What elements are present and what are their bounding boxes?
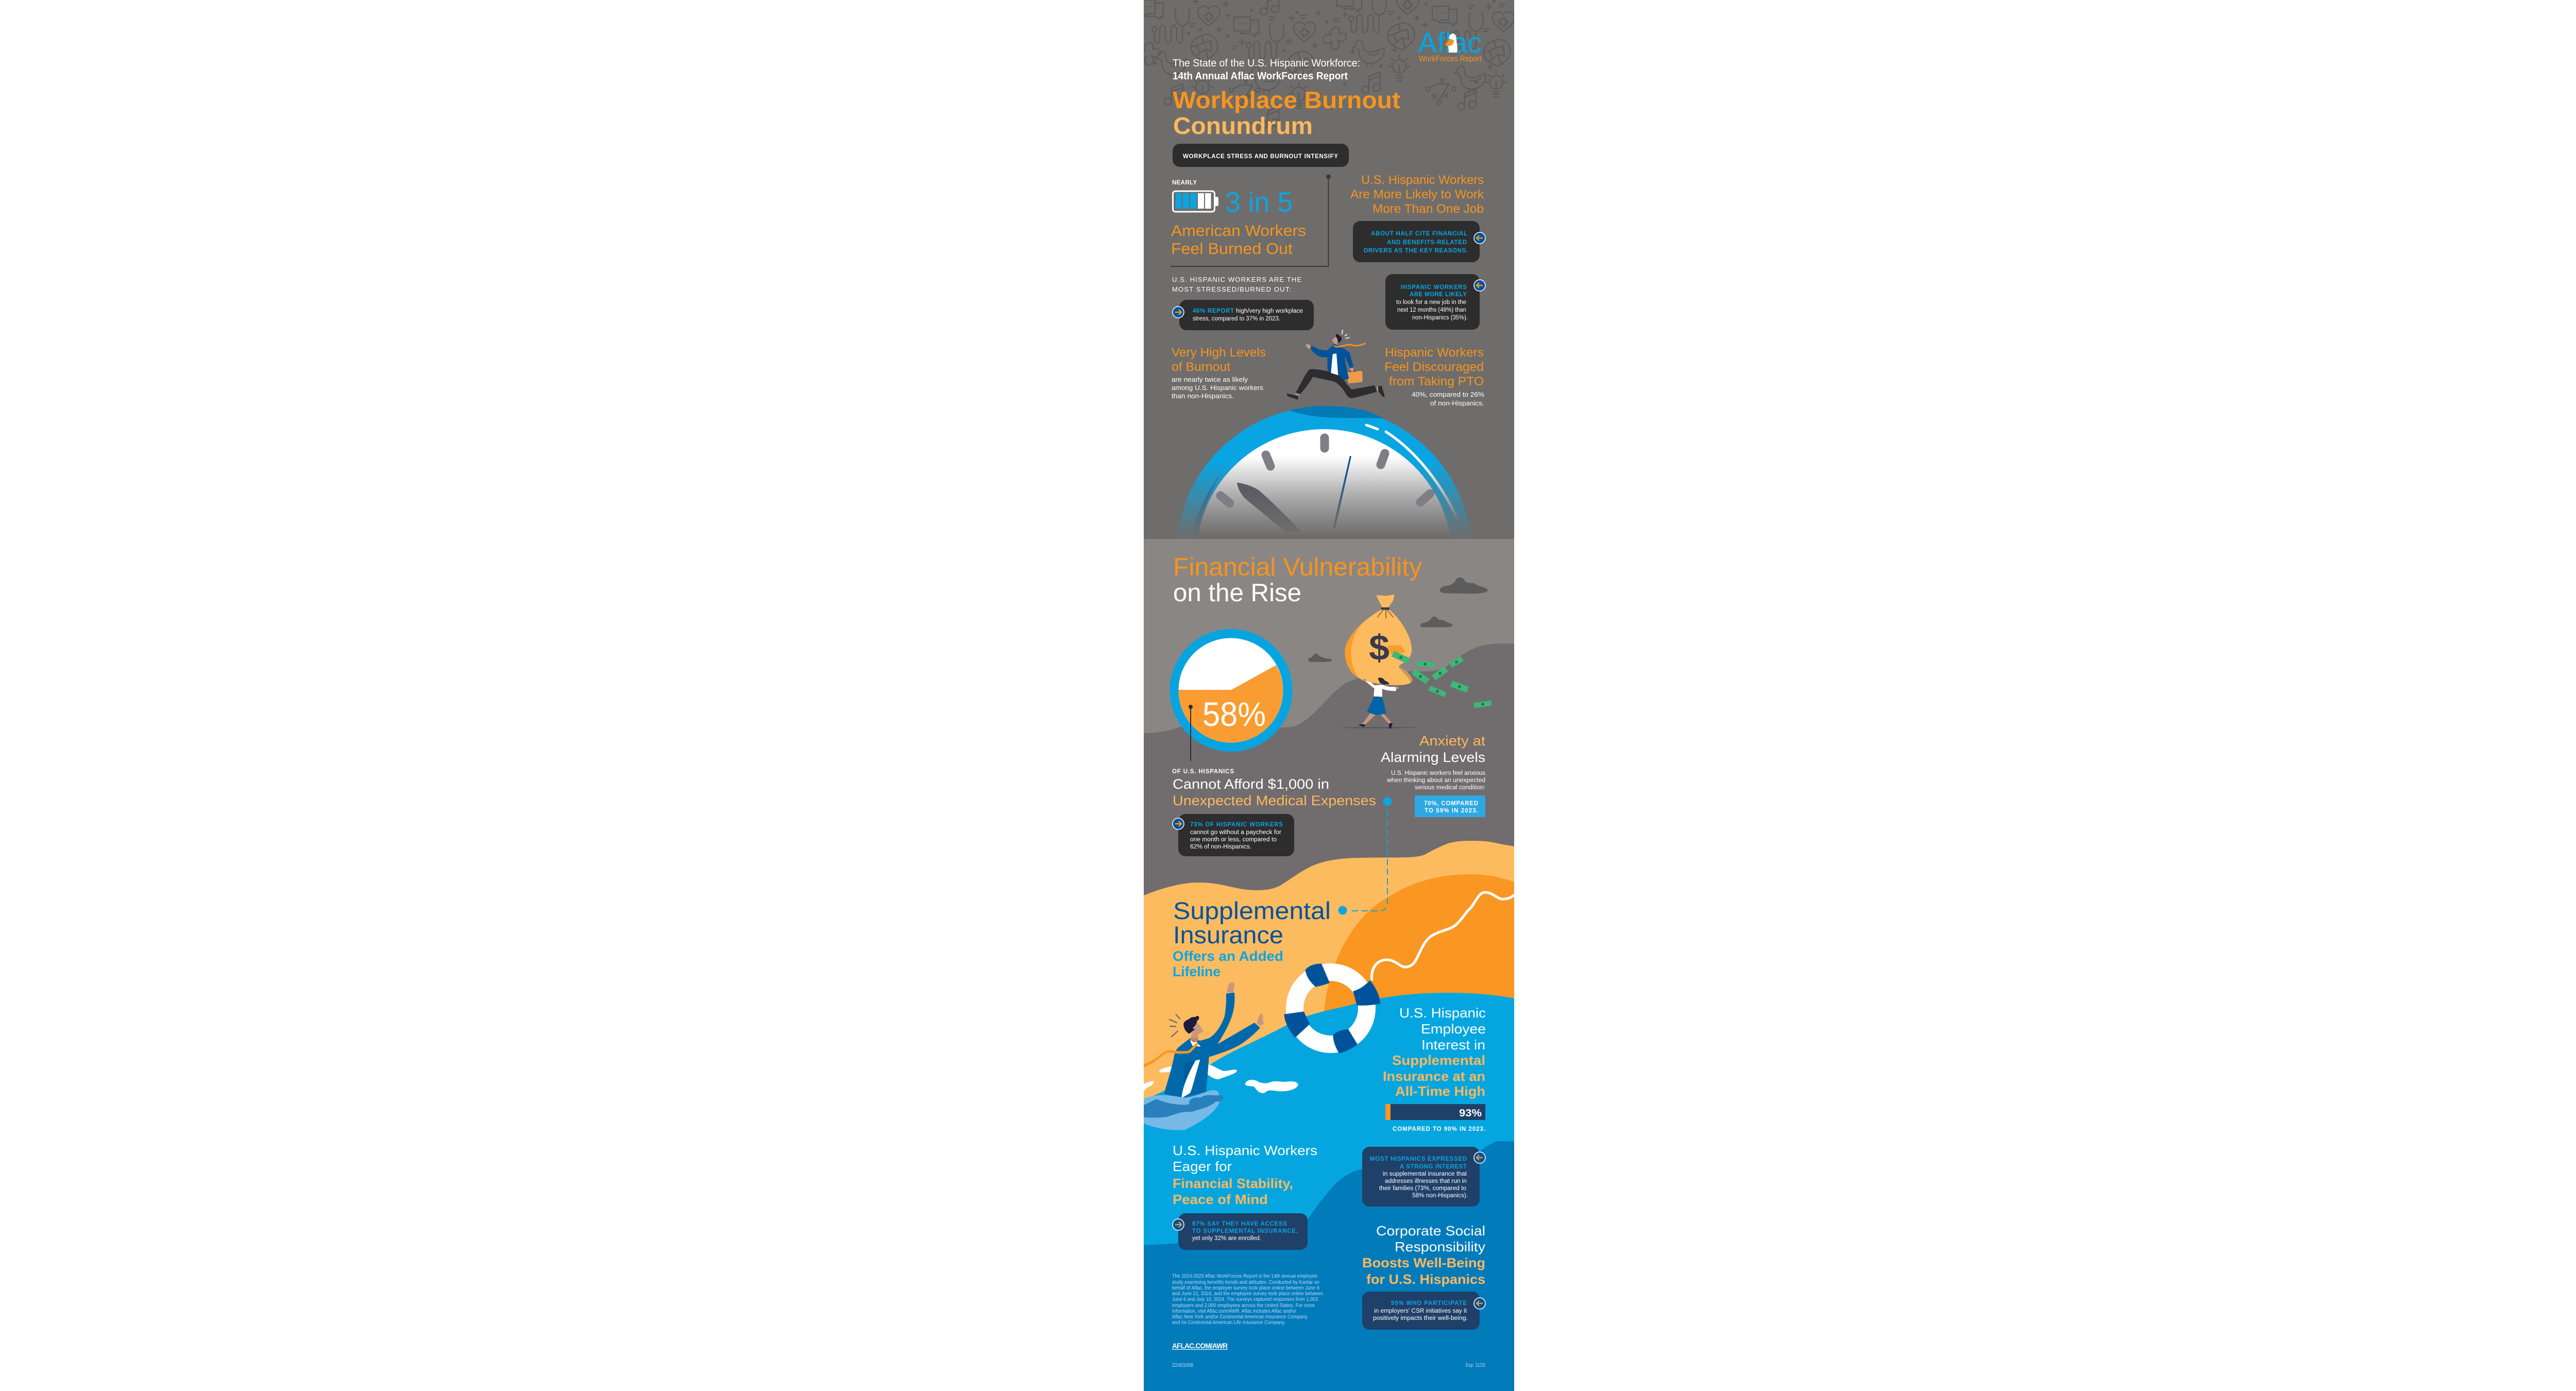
stat: nearly 3 in 5 xyxy=(1171,180,1306,258)
illustration: man in water xyxy=(1144,982,1298,1130)
callout: 73% of hispanic workers: 73% OF HISPANIC WORKERS xyxy=(1190,822,1283,828)
heading: supplemental insurance: Lifeline xyxy=(1173,964,1221,979)
text block: eager for financial stability xyxy=(1173,1143,1317,1207)
callout: hispanic workers more likely: ARE MORE LIKELY xyxy=(1410,292,1467,298)
text block: most stressed: MOST STRESSED/BURNED OUT: xyxy=(1172,285,1291,293)
yellow wave xyxy=(1144,841,1514,1133)
callout: hispanic workers more likely: next 12 months (48%) than xyxy=(1397,307,1466,313)
text block: eager for financial stability: Peace of Mind xyxy=(1173,1192,1268,1207)
title: Conundrum xyxy=(1173,112,1313,139)
text block: discouraged from PTO: from Taking PTO xyxy=(1389,375,1484,388)
footnote: and /or Continental American Life Insurance Company. xyxy=(1172,1319,1285,1326)
text block: discouraged from PTO: Hispanic Workers xyxy=(1385,346,1484,360)
panel: workplace burnout section xyxy=(1137,0,1515,702)
callout: 46% report: stress, compared to 37% in 2023. xyxy=(1193,316,1280,322)
link: aflac.com/awr: AFLAC.COM/AWR xyxy=(1172,1342,1228,1350)
callout: strong interest xyxy=(1362,1147,1485,1207)
text block: corporate social responsibility: Boosts Well-Being xyxy=(1362,1255,1485,1270)
logo: Aflac WorkForces Report: WorkForces Report xyxy=(1419,55,1482,63)
text block: most stressed xyxy=(1172,276,1301,293)
callout: 73% of hispanic workers: one month or less, compared to xyxy=(1190,837,1277,843)
text block: all-time high: Interest in xyxy=(1421,1037,1485,1053)
stat: nearly 3 in 5: NEARLY xyxy=(1172,180,1197,186)
callout: half cite financial: AND BENEFITS-RELATED xyxy=(1387,240,1467,246)
callout: 95% who participate: positively impacts their well-being. xyxy=(1373,1315,1468,1321)
chart: 58% gauge xyxy=(1170,629,1292,761)
text block: discouraged from PTO: of non-Hispanics. xyxy=(1430,400,1484,407)
text block: very high burnout: Very High Levels xyxy=(1172,346,1266,360)
heading: financial vulnerability: on the Rise xyxy=(1173,579,1301,607)
text block: anxiety at alarming levels: when thinking about an unexpected xyxy=(1386,777,1485,784)
connector: dashed line xyxy=(1338,798,1392,915)
callout: 95% who participate xyxy=(1362,1292,1485,1330)
text block: cannot afford $1,000: OF U.S. HISPANICS xyxy=(1172,769,1234,775)
title: Workplace Burnout xyxy=(1173,87,1400,113)
callout: hispanic workers more likely: to look for a new job in the xyxy=(1396,299,1466,306)
text block: corporate social responsibility: Corporate Social xyxy=(1376,1223,1485,1239)
panel: financial vulnerability section xyxy=(1144,539,1514,910)
icon: flying bills xyxy=(1392,651,1492,708)
subtitle xyxy=(1173,58,1360,82)
footnote: and June 21, 2024, and the employee survey took place online between xyxy=(1172,1291,1323,1297)
callout: 87% access xyxy=(1173,1213,1308,1250)
callout: 95% who participate: 95% WHO PARTICIPATE xyxy=(1391,1300,1467,1307)
callout: 70% compared to 59%: TO 59% IN 2023. xyxy=(1425,808,1478,814)
chart: 93% bar: 93% xyxy=(1459,1108,1482,1119)
heading: supplemental insurance: Offers an Added xyxy=(1173,948,1283,964)
callout: 87% access: yet only 32% are enrolled. xyxy=(1192,1235,1261,1242)
text block: corporate social responsibility: for U.S. Hispanics xyxy=(1366,1271,1485,1287)
text block: all-time high: U.S. Hispanic xyxy=(1399,1005,1486,1021)
text block: very high burnout: are nearly twice as likely xyxy=(1172,376,1248,383)
dark blue water xyxy=(1144,1141,1514,1391)
footnote: The 2024-2025 Aflac WorkForces Report is the 14th annual employee xyxy=(1172,1273,1317,1279)
background hill xyxy=(1144,643,1514,907)
callout: 46% report xyxy=(1173,300,1314,330)
text block: very high burnout: of Burnout xyxy=(1172,360,1230,374)
footnote: information, visit Aflac.com/AWR. Aflac includes Aflac and/or xyxy=(1172,1308,1296,1314)
background icon pattern xyxy=(1137,0,1515,128)
stat: nearly 3 in 5: American Workers xyxy=(1171,222,1306,240)
job code: Z2401008 xyxy=(1172,1362,1193,1368)
callout: 87% access: 87% SAY THEY HAVE ACCESS xyxy=(1192,1221,1287,1227)
callout: half cite financial: ABOUT HALF CITE FINANCIAL xyxy=(1371,231,1467,237)
icon: clouds xyxy=(1308,578,1488,662)
callout: half cite financial xyxy=(1353,221,1485,262)
text block: more than one job: U.S. Hispanic Workers xyxy=(1361,173,1484,187)
pill heading: WORKPLACE STRESS AND BURNOUT INTENSIFY xyxy=(1183,154,1338,160)
callout: hispanic workers more likely xyxy=(1385,274,1485,330)
callout: 46% report: 46% REPORT xyxy=(1193,308,1234,314)
text block: cannot afford $1,000: Unexpected Medical Expenses xyxy=(1173,793,1376,808)
callout: 70% compared to 59%: 70%, COMPARED xyxy=(1424,801,1478,807)
text block: cannot afford $1,000 xyxy=(1172,769,1376,808)
panel: supplemental insurance section xyxy=(1144,798,1514,1391)
text block: very high burnout: among U.S. Hispanic workers xyxy=(1172,384,1263,392)
logo: Aflac WorkForces Report: Aflac xyxy=(1418,26,1482,59)
subtitle: 14th Annual Aflac WorkForces Report xyxy=(1173,71,1348,82)
text block: more than one job xyxy=(1350,173,1484,216)
footnote xyxy=(1172,1273,1323,1326)
callout: strong interest: A STRONG INTEREST xyxy=(1400,1164,1467,1170)
text block: very high burnout xyxy=(1172,346,1266,400)
text block: eager for financial stability: Financial Stability, xyxy=(1173,1176,1293,1191)
callout: strong interest: 58% non-Hispanics). xyxy=(1412,1193,1468,1199)
text block: anxiety at alarming levels xyxy=(1381,733,1486,791)
text block: corporate social responsibility xyxy=(1362,1223,1485,1287)
text block: cannot afford $1,000: Cannot Afford $1,000 in xyxy=(1173,776,1329,792)
chart: 93% bar: COMPARED TO 90% IN 2023. xyxy=(1393,1126,1485,1132)
text block: eager for financial stability: U.S. Hispanic Workers xyxy=(1173,1143,1317,1158)
icon: dollar sign: $ xyxy=(1369,627,1389,668)
footnote: June 6 and July 10, 2024. The surveys captured responses from 1,003 xyxy=(1172,1296,1318,1302)
callout: hispanic workers more likely: HISPANIC WORKERS xyxy=(1401,284,1467,291)
footnote: Aflac New York and/or Continental American Insurance Company xyxy=(1172,1314,1308,1320)
text block: anxiety at alarming levels: serious medical condition: xyxy=(1415,785,1485,791)
text block: more than one job: More Than One Job xyxy=(1372,202,1484,216)
stat: nearly 3 in 5: Feel Burned Out xyxy=(1171,240,1293,258)
callout: 73% of hispanic workers: 62% of non-Hispanics. xyxy=(1190,844,1251,850)
footnote: employers and 2,000 employees across the United States. For more xyxy=(1172,1302,1315,1309)
blue water xyxy=(1144,993,1514,1391)
text block: all-time high: Employee xyxy=(1421,1021,1486,1037)
callout: 70% compared to 59% xyxy=(1415,795,1485,817)
pill heading xyxy=(1173,144,1349,167)
callout: strong interest: their families (73%, compared to xyxy=(1379,1185,1466,1192)
chart: 58% gauge: 58% xyxy=(1202,695,1266,733)
callout: 46% report: high/very high workplace xyxy=(1236,308,1303,314)
heading: financial vulnerability: Financial Vulnerability xyxy=(1173,553,1422,581)
text block: discouraged from PTO: Feel Discouraged xyxy=(1384,360,1484,374)
footnote: study examining benefits trends and attitudes. Conducted by Kantar on xyxy=(1172,1279,1319,1285)
text block: anxiety at alarming levels: U.S. Hispanic workers feel anxious xyxy=(1391,770,1485,776)
callout: 73% of hispanic workers xyxy=(1173,814,1294,856)
illustration: running man xyxy=(1287,330,1385,400)
pointer line xyxy=(1189,705,1193,761)
footnote: behalf of Aflac, the employer survey took place online between June 6 xyxy=(1172,1285,1319,1291)
illustration: clock xyxy=(1176,406,1472,702)
text block: all-time high: Insurance at an xyxy=(1383,1068,1485,1084)
callout: 73% of hispanic workers: cannot go without a paycheck for xyxy=(1190,829,1281,836)
text block: all-time high xyxy=(1383,1005,1486,1099)
callout: 87% access: TO SUPPLEMENTAL INSURANCE, xyxy=(1192,1228,1298,1234)
callout: half cite financial: DRIVERS AS THE KEY REASONS. xyxy=(1364,248,1468,254)
text block: very high burnout: than non-Hispanics. xyxy=(1172,393,1234,400)
expiry date: Exp. 11/25 xyxy=(1466,1362,1485,1368)
orange shape xyxy=(1324,874,1514,1017)
subtitle: The State of the U.S. Hispanic Workforce: xyxy=(1173,58,1360,69)
text block: anxiety at alarming levels: Anxiety at xyxy=(1419,733,1486,749)
title xyxy=(1173,87,1400,139)
chart: 93% bar xyxy=(1385,1104,1485,1132)
illustration: woman carrying money bag xyxy=(1308,578,1492,729)
text block: discouraged from PTO: 40%, compared to 26% xyxy=(1412,391,1484,398)
text block: corporate social responsibility: Responsibility xyxy=(1395,1239,1485,1254)
callout: strong interest: in supplemental insurance that xyxy=(1383,1171,1467,1177)
text block: discouraged from PTO xyxy=(1384,346,1484,407)
callout: strong interest: addresses illnesses that run in xyxy=(1385,1178,1467,1184)
callout: strong interest: MOST HISPANICS EXPRESSED xyxy=(1370,1156,1467,1162)
stat: nearly 3 in 5: 3 in 5 xyxy=(1225,186,1293,218)
heading: supplemental insurance: Insurance xyxy=(1173,921,1283,948)
white curve line xyxy=(1372,892,1514,980)
icon: battery xyxy=(1173,191,1218,212)
heading: supplemental insurance: Supplemental xyxy=(1173,897,1331,924)
connector line xyxy=(1171,175,1330,266)
heading: financial vulnerability xyxy=(1173,553,1422,607)
text block: most stressed: U.S. HISPANIC WORKERS ARE THE xyxy=(1172,276,1301,283)
text block: all-time high: Supplemental xyxy=(1392,1053,1485,1068)
text block: anxiety at alarming levels: Alarming Levels xyxy=(1381,750,1485,765)
callout: hispanic workers more likely: non-Hispanics (35%). xyxy=(1412,315,1468,321)
illustration: life ring xyxy=(1285,964,1380,1053)
text block: all-time high: All-Time High xyxy=(1395,1083,1485,1099)
text block: more than one job: Are More Likely to Work xyxy=(1350,188,1484,201)
heading: supplemental insurance xyxy=(1173,897,1331,979)
text block: eager for financial stability: Eager for xyxy=(1173,1159,1232,1174)
callout: 95% who participate: in employers' CSR initiatives say it xyxy=(1374,1308,1467,1314)
